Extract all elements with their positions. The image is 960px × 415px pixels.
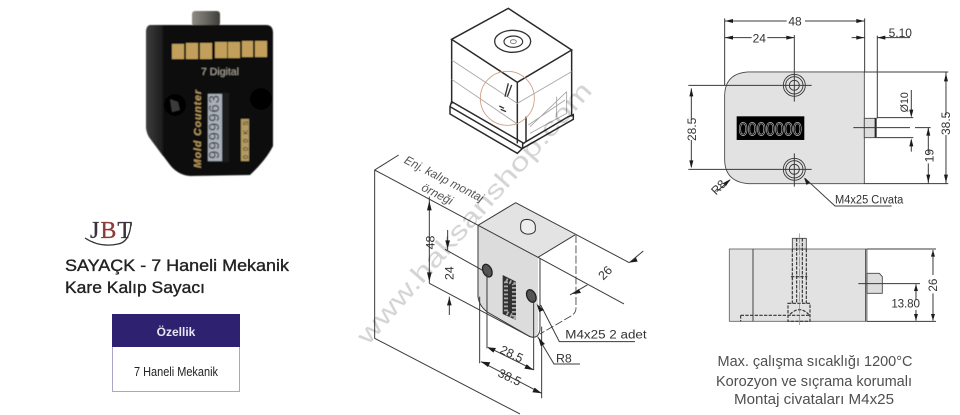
title: Kare Kalıp Sayacı: [65, 279, 205, 297]
base rail: [450, 102, 573, 153]
counter window: [503, 275, 516, 320]
labels: Ø10: [899, 92, 911, 112]
table header: [112, 314, 240, 347]
dimension labels: 26: [596, 263, 615, 283]
table: özellik: [112, 314, 240, 392]
specifications text: [716, 354, 912, 408]
title: [65, 257, 290, 297]
counter faces: [478, 203, 575, 257]
dimension labels: 13.80: [891, 297, 920, 310]
left side face: [146, 25, 163, 156]
dimension labels: [423, 235, 647, 389]
product photo: mechanical counter: 000KS: [243, 121, 250, 159]
labels: 48: [788, 15, 802, 29]
specifications text: Korozyon ve sıçrama korumalı: [716, 374, 912, 390]
mounting note: örneği: [419, 180, 456, 208]
top stud: [495, 30, 531, 52]
front dimension drawing: [685, 15, 953, 206]
labels: 24: [753, 31, 766, 45]
title: SAYAÇK - 7 Haneli Mekanik: [65, 257, 290, 275]
bolts: [783, 74, 805, 180]
product photo: mechanical counter: [146, 11, 273, 176]
brand text: Mold Counter: [192, 89, 204, 168]
labels: 5.10: [889, 26, 912, 40]
window detail: [528, 92, 567, 133]
dimension labels: R8: [556, 352, 572, 366]
dimension lines: [688, 18, 948, 206]
small gold label: [241, 119, 249, 161]
labels: M4x25 Cıvata: [835, 192, 904, 206]
counter window: [207, 93, 229, 162]
side band lines: [452, 60, 572, 124]
mould mounting drawing: [375, 153, 647, 414]
dimension lines: [429, 197, 643, 398]
counter body: [146, 25, 273, 176]
side dimension drawing: [729, 233, 940, 326]
labels: 38.5: [939, 111, 953, 135]
bolt hidden lines: [792, 238, 806, 249]
arrows: [427, 201, 638, 393]
shaft: [867, 273, 882, 293]
dimension labels: 24: [442, 266, 456, 280]
specifications text: Max. çalışma sıcaklığı 1200°C: [718, 354, 912, 370]
mounting bolts: [481, 263, 538, 304]
product photo: mechanical counter: 9999963: [206, 95, 223, 159]
labels: [685, 15, 953, 206]
detail circle: [480, 71, 534, 125]
labels: 28.5: [685, 117, 699, 141]
header label: Özellik: [157, 324, 196, 339]
isometric drawing with circled detail: [450, 8, 573, 153]
dimension labels: 26: [927, 279, 940, 292]
top stud: [521, 219, 535, 234]
labels: R8: [708, 177, 729, 198]
dimension labels: M4x25 2 adet: [565, 327, 647, 341]
body: [729, 249, 867, 321]
stud: [192, 11, 220, 26]
specifications text: Montaj civataları M4x25: [734, 392, 894, 408]
display: [737, 116, 804, 140]
model label: 7 Digital: [201, 66, 239, 78]
counter plate: [725, 72, 864, 184]
dimension labels: 38.5: [496, 366, 524, 389]
dimension labels: 28.5: [498, 343, 526, 366]
table value: 7 Haneli Mekanik: [134, 364, 218, 379]
labels: 19: [922, 149, 936, 162]
dimension labels: 48: [423, 235, 437, 249]
dimension labels: [891, 279, 940, 310]
dimension lines: [858, 249, 936, 321]
arrows: [689, 19, 948, 186]
gold indicator squares: [172, 41, 267, 59]
shaft: [864, 118, 876, 138]
JBT logo: JBT: [90, 218, 132, 244]
mounting screws: [164, 94, 186, 116]
mounting note: Enj. kalıp montaj: [402, 153, 486, 205]
watermark: www.haksanshop.com: [349, 75, 598, 351]
mould block outline: [375, 155, 629, 414]
front dimension drawing: 0000000: [739, 118, 802, 139]
